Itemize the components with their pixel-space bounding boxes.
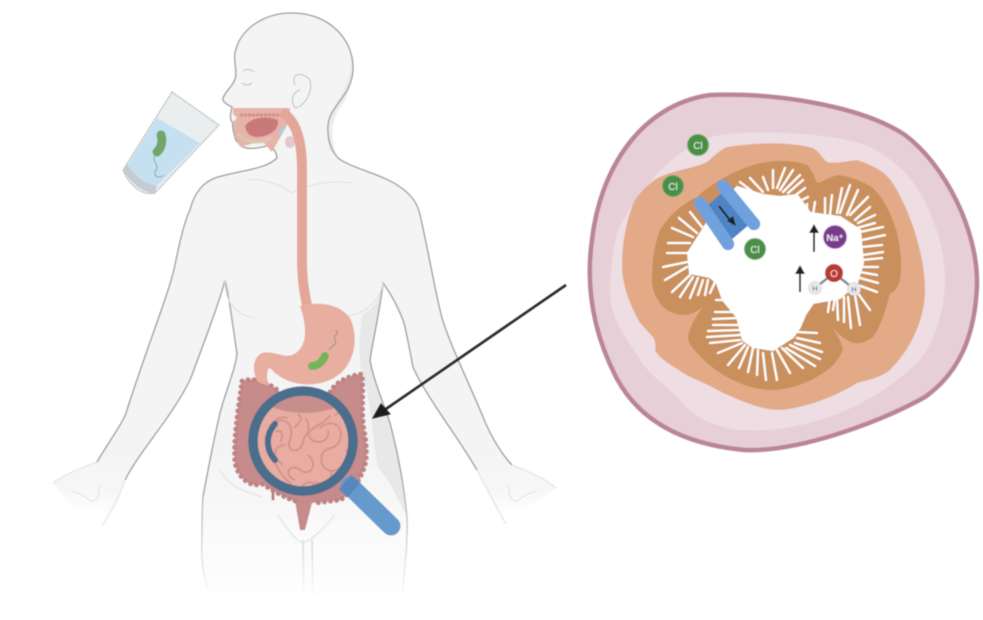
magnifier lens with small intestine [253,385,355,491]
hand fades [33,503,137,547]
mouth and throat [233,108,295,152]
body silhouette [53,13,556,605]
outer intestinal wall [590,95,977,450]
chloride channel [700,186,754,244]
panel: human body [52,12,556,586]
chest and pelvis creases [220,180,383,543]
mucosa layer [652,161,901,390]
stomach and duodenum [254,304,355,386]
arrow to intestine cross-section [373,285,566,418]
lumen [688,187,863,350]
body shading [327,60,407,517]
face details [242,69,311,108]
water molecule with arrow: H [812,284,818,293]
stomach bacterium [312,330,337,366]
glass of water with bacterium [123,92,219,194]
large intestine [235,374,366,530]
chloride ion, top: Cl [693,141,703,152]
chloride ion, top [688,134,708,156]
magnifying glass handle [345,482,391,526]
sodium ion with arrow [809,224,846,252]
sodium ion with arrow: Na⁺ [826,233,844,244]
water molecule with arrow [795,264,860,296]
water molecule with arrow: O [830,269,838,280]
chloride ion, left [662,176,684,196]
hand outlines [53,462,556,526]
muscle layer [622,143,925,410]
esophagus [282,112,309,315]
villi [663,168,885,380]
panel: intestine cross-section [590,95,977,450]
chloride ion, left: Cl [668,182,678,193]
chloride ion, lumen [744,238,766,260]
inner pale layer [610,132,945,430]
water molecule with arrow: H [851,285,857,294]
bacterium [157,135,162,152]
body outlines [97,13,512,497]
chloride ion, lumen: Cl [750,245,760,256]
